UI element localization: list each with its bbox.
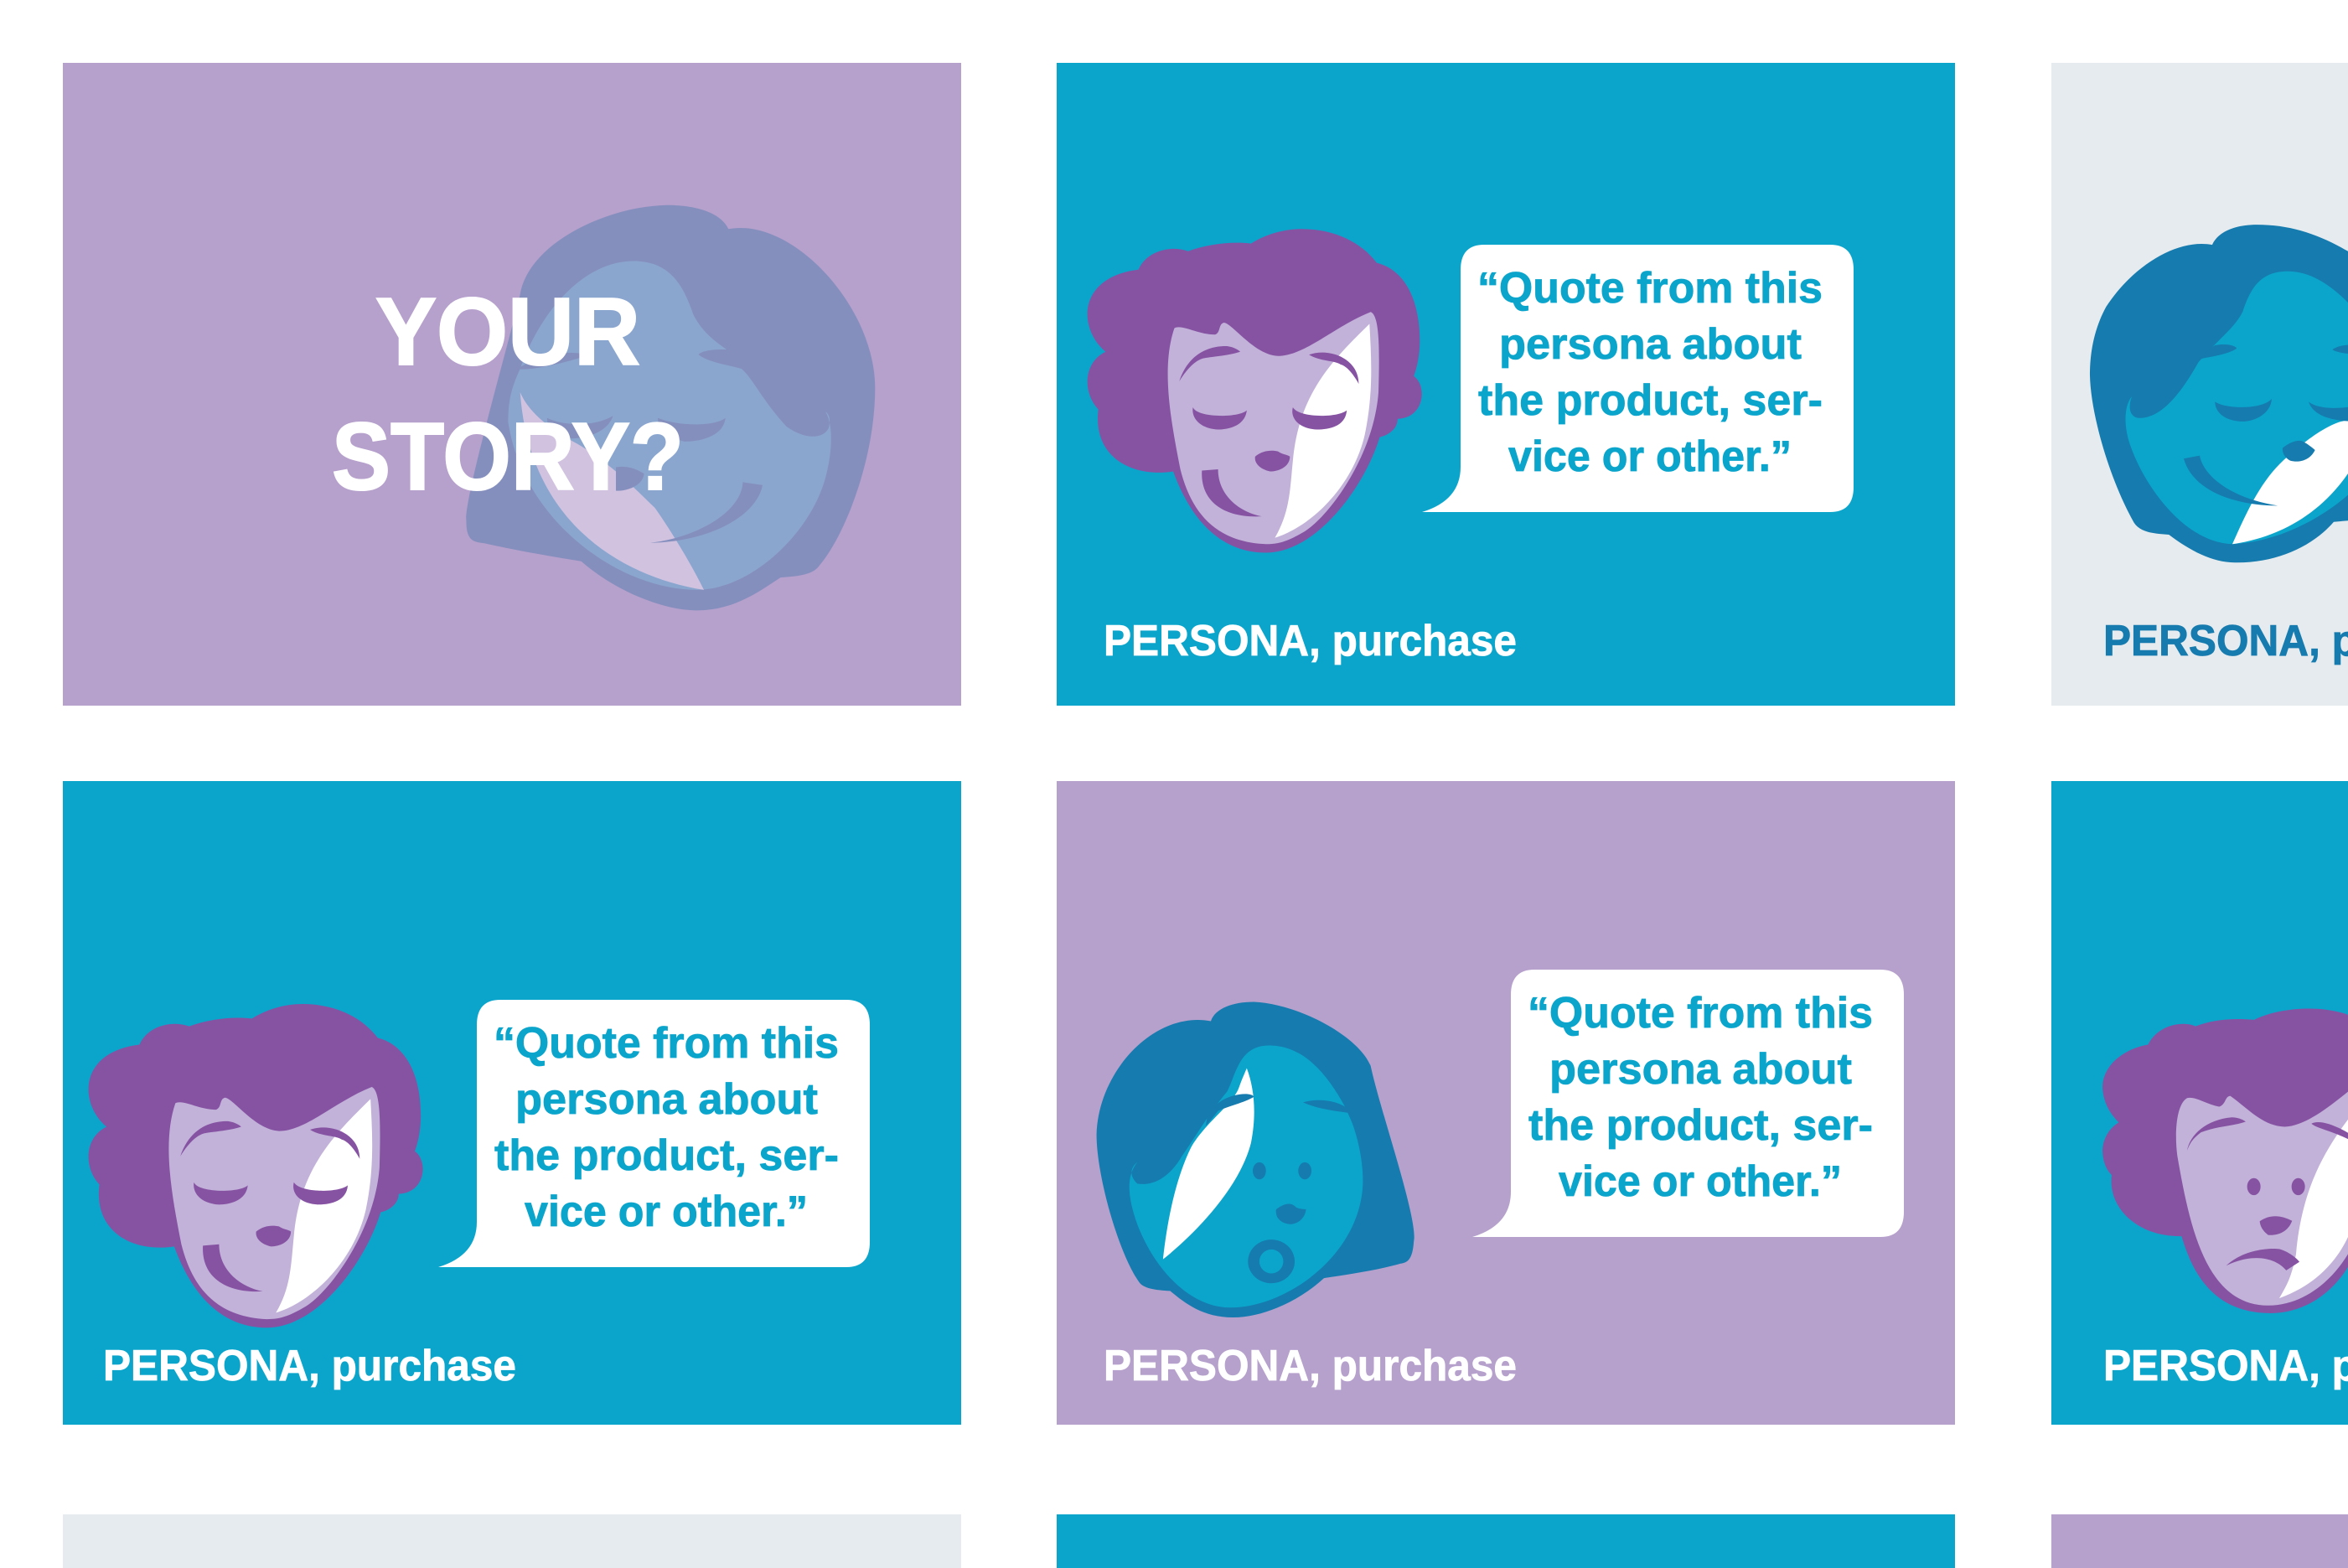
icon: faded persona face xyxy=(466,205,875,610)
callout: quote bubble: vice or other.” xyxy=(525,1188,808,1236)
callout: quote bubble xyxy=(1472,970,1904,1237)
callout: quote bubble: the product, ser- xyxy=(1478,376,1823,425)
heading: your story: STORY? xyxy=(332,404,684,510)
callout: quote bubble: the product, ser- xyxy=(1528,1101,1873,1150)
callout: quote bubble: “Quote from this xyxy=(1477,264,1823,313)
icon: curly hair persona smiling xyxy=(1088,229,1422,552)
callout: quote bubble: vice or other.” xyxy=(1508,432,1792,481)
callout: quote bubble: persona about xyxy=(515,1075,818,1124)
callout: quote bubble: “Quote from this xyxy=(1528,989,1873,1038)
caption: persona name: PERSONA, purchase xyxy=(1104,617,1517,665)
callout: quote bubble: the product, ser- xyxy=(494,1131,839,1180)
callout: quote bubble: vice or other.” xyxy=(1559,1157,1842,1206)
icon: dark hair persona smiling xyxy=(2090,225,2348,562)
panel: bottom row purple card xyxy=(2051,1514,2348,1568)
icon: dark hair persona surprised xyxy=(1097,1002,1414,1317)
caption: persona name: PERSONA, purchase xyxy=(103,1342,516,1390)
panel: frowning persona on blue xyxy=(2051,781,2348,1425)
icon: curly hair persona frowning xyxy=(2102,1008,2348,1313)
panel: curly persona low on blue xyxy=(63,781,961,1425)
callout: quote bubble xyxy=(1422,245,1854,512)
panel: surprised persona on purple xyxy=(1057,781,1955,1425)
callout: quote bubble: persona about xyxy=(1549,1045,1852,1094)
callout: quote bubble xyxy=(438,1000,870,1267)
heading: your story: YOUR xyxy=(375,279,640,386)
panel: bottom row grey card xyxy=(63,1514,961,1568)
callout: quote bubble: persona about xyxy=(1499,320,1802,369)
icon: curly hair persona smiling xyxy=(88,1004,423,1327)
caption: persona name: PERSONA, purchase xyxy=(1104,1342,1517,1390)
panel: curly persona on blue xyxy=(1057,63,1955,706)
heading: your story xyxy=(332,279,684,510)
panel: bottom row blue card xyxy=(1057,1514,1955,1568)
callout: quote bubble: “Quote from this xyxy=(494,1019,839,1068)
panel: dark hair persona on grey xyxy=(2051,63,2348,706)
panel: your story xyxy=(63,63,961,706)
